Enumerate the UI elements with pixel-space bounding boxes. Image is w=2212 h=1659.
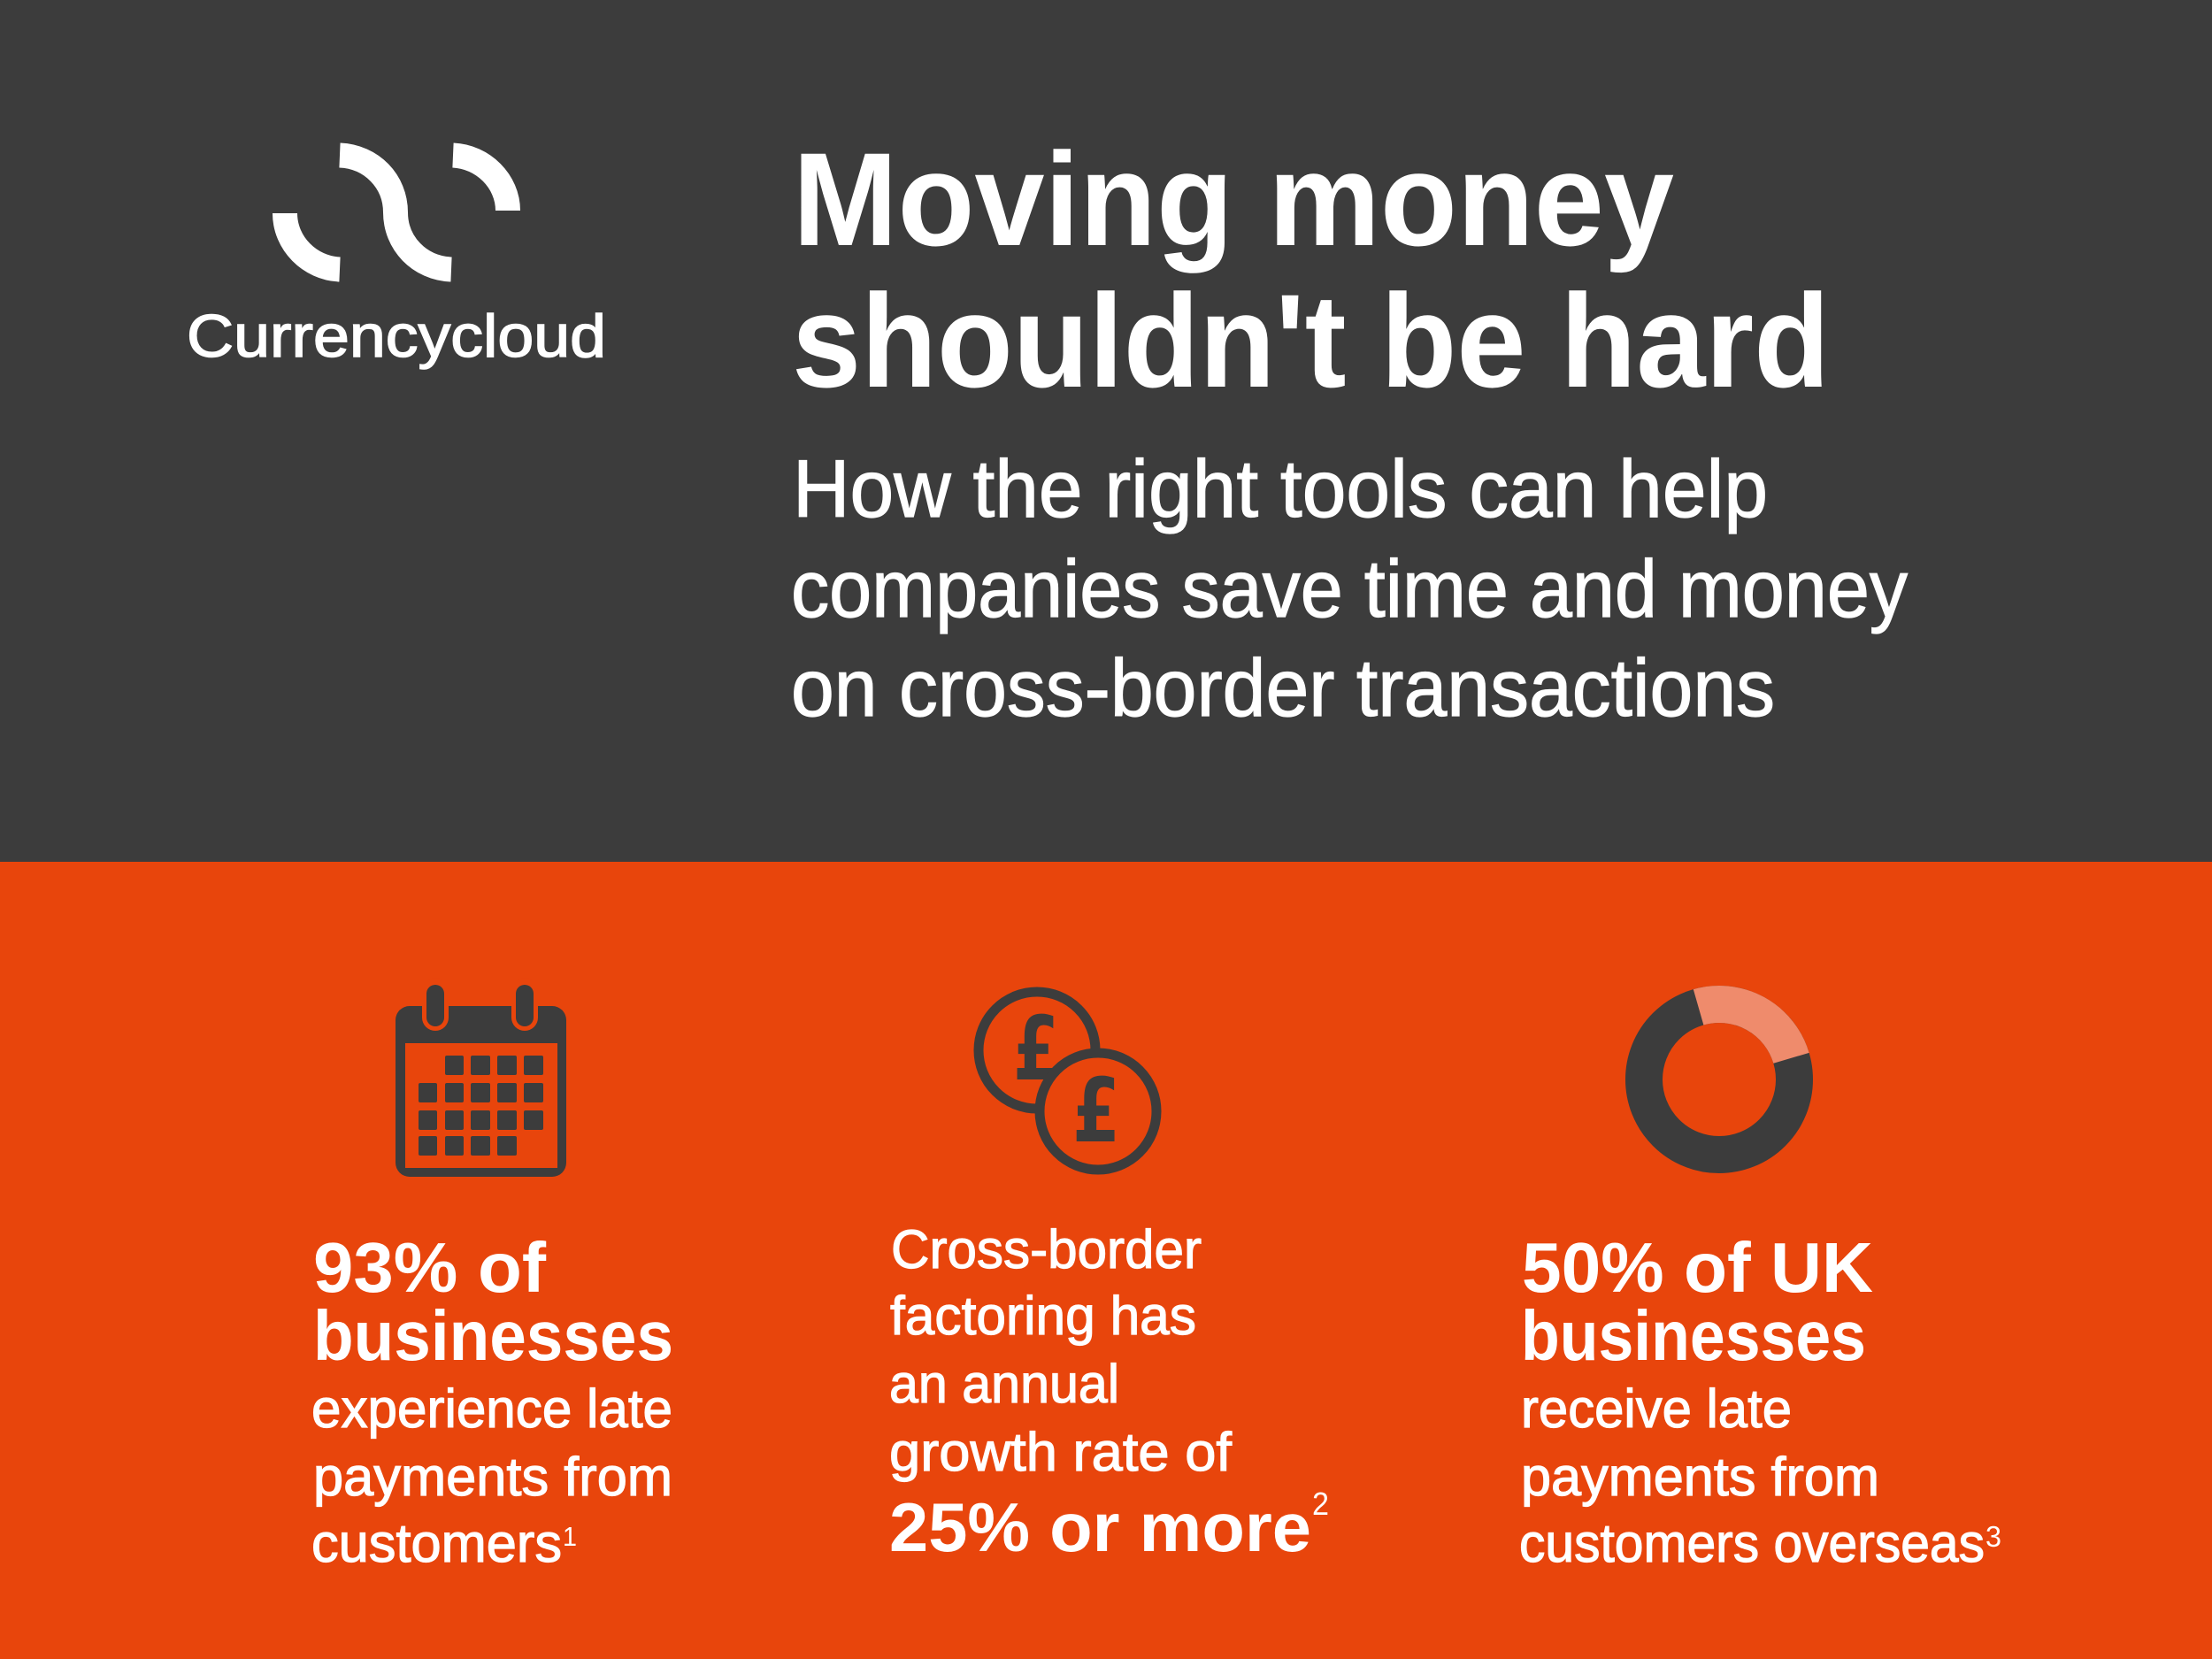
text: 50% of UK businesses: 50% of UK	[1522, 1228, 1873, 1307]
text: 50% of UK businesses: customers overseas	[1519, 1513, 1985, 1573]
title: Moving money	[793, 125, 1674, 273]
subtitle: How the right tools can help	[793, 444, 1768, 534]
text: cross-border factoring	[889, 1219, 1329, 1566]
panel: orange statistics	[0, 862, 2212, 1659]
text: cross-border factoring: factoring has	[890, 1286, 1196, 1346]
logo: Currencycloud	[187, 156, 606, 370]
statistic: UK late payments	[1519, 1004, 2001, 1573]
icon: pound coins	[979, 992, 1156, 1170]
icon: pound coins: £	[1013, 997, 1059, 1101]
statistic: factoring growth	[889, 992, 1329, 1566]
statistic: late payments	[311, 978, 673, 1573]
title	[792, 125, 1830, 415]
subtitle	[791, 444, 1908, 733]
icon: calendar	[396, 978, 566, 1177]
text: 50% of UK businesses: receive late	[1521, 1379, 1792, 1439]
panel: dark header	[0, 0, 2212, 863]
text: cross-border factoring: Cross-border	[891, 1219, 1202, 1279]
text: 50% of UK businesses: businesses	[1521, 1296, 1866, 1375]
text: cross-border factoring: 25% or more	[889, 1488, 1311, 1566]
text: 50% of UK businesses	[1519, 1228, 2001, 1573]
text: 93% of businesses: 1	[563, 1521, 577, 1552]
text: 93% of businesses	[311, 1228, 673, 1573]
icon: pound coins: £	[1072, 1059, 1120, 1163]
text: cross-border factoring: an annual	[889, 1354, 1119, 1414]
text: 50% of UK businesses: payments from	[1521, 1447, 1879, 1507]
text: 93% of businesses: 93% of	[313, 1228, 546, 1307]
text: 93% of businesses: businesses	[313, 1296, 673, 1375]
title: shouldn't be hard	[792, 266, 1830, 415]
icon: logo waves	[285, 156, 508, 269]
subtitle: on cross-border transactions	[791, 643, 1775, 733]
text: cross-border factoring: 2	[1312, 1486, 1329, 1522]
logo wordmark: Currencycloud	[187, 303, 606, 370]
text: cross-border factoring: growth rate of	[889, 1422, 1233, 1482]
subtitle: companies save time and money	[791, 544, 1908, 634]
text: 93% of businesses: payments from	[313, 1447, 672, 1507]
icon: donut chart	[1644, 1004, 1794, 1155]
text: 50% of UK businesses: 3	[1985, 1520, 2001, 1553]
text: 93% of businesses: customers	[311, 1513, 562, 1573]
text: 93% of businesses: experience late	[311, 1379, 672, 1439]
